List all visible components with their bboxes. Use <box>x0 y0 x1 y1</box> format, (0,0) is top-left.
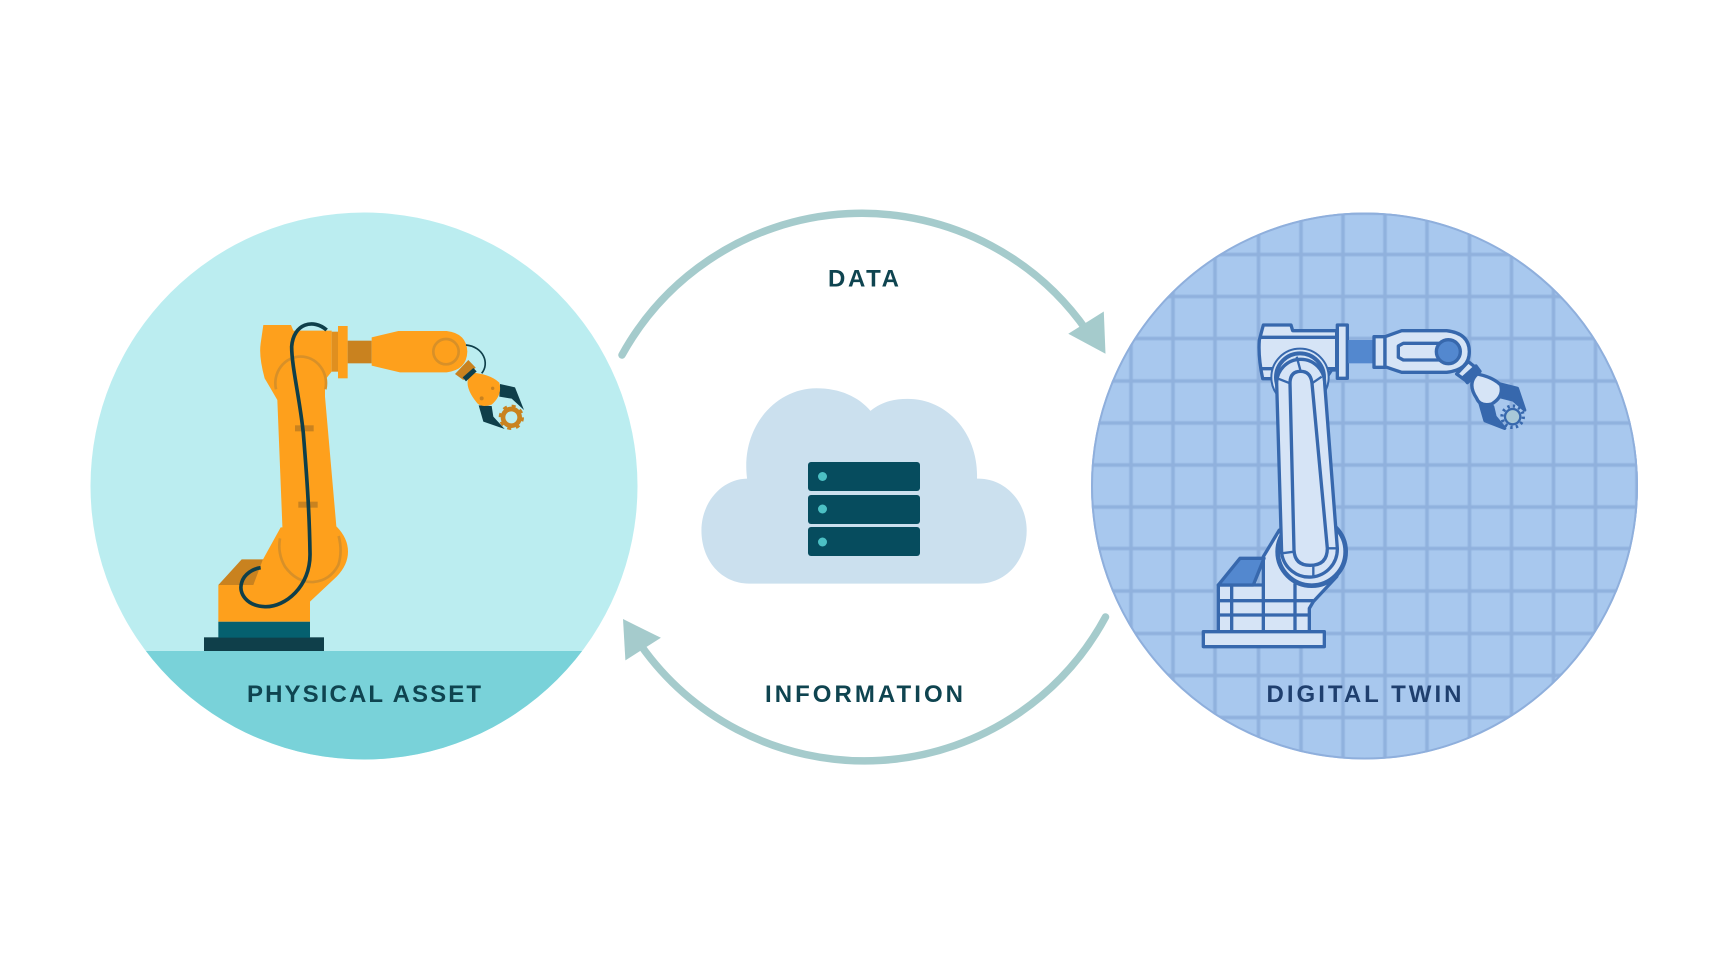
icon: blueprint robot arm <box>1203 325 1525 647</box>
label: data: DATA <box>828 266 899 292</box>
circle background <box>90 212 638 760</box>
icon: server stack <box>808 462 920 556</box>
panel: center exchange <box>622 213 1106 761</box>
circle background <box>1091 212 1638 760</box>
label: digital twin: DIGITAL TWIN <box>1266 681 1462 708</box>
arrow: information to physical asset <box>623 617 1106 761</box>
icon: cloud <box>701 388 1027 584</box>
label: physical asset: PHYSICAL ASSET <box>247 681 481 708</box>
floor <box>146 651 582 760</box>
icon: orange robot arm <box>204 324 524 651</box>
arrow: data to digital twin <box>622 213 1106 355</box>
panel: digital twin <box>1080 200 1650 770</box>
panel: physical asset <box>80 212 650 771</box>
label: information: INFORMATION <box>765 681 963 708</box>
blueprint grid <box>1080 200 1650 770</box>
